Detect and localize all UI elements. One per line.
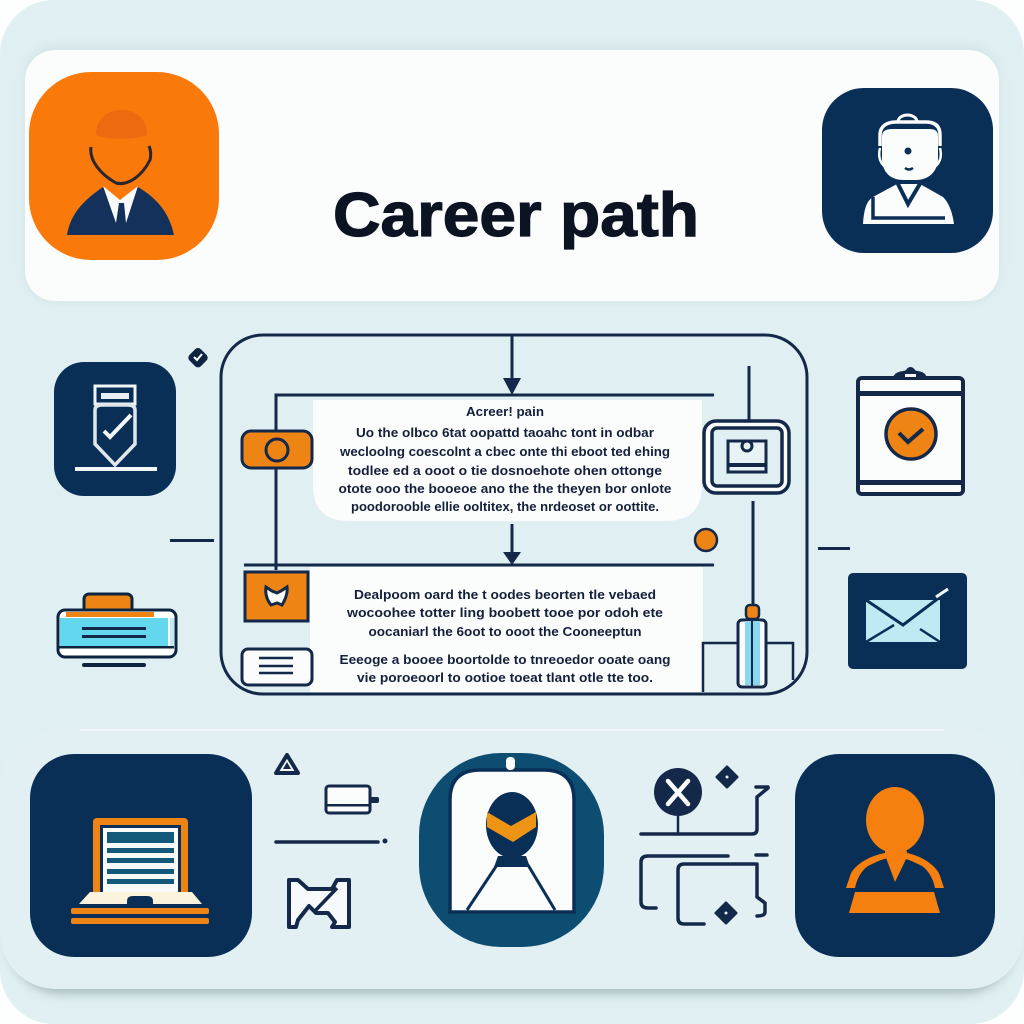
icon: navy person avatar — [822, 88, 993, 253]
connector lines and arrows — [244, 336, 753, 606]
icon: portrait tile — [419, 753, 604, 947]
icon: envelope tile — [848, 573, 967, 669]
panel: bottom icon row — [30, 753, 995, 957]
icon: orange figure tile — [795, 754, 995, 957]
panel: lower text card: vie poroeoorl to ootioe toeat tlant otle tte too. — [357, 670, 653, 685]
icon: diamond spark top — [717, 767, 737, 787]
icon: small triangle — [276, 755, 298, 773]
connector bracket top — [641, 787, 768, 834]
icon: clipboard check — [858, 367, 963, 494]
panel: lower text card: oocaniarl the 6oot to ooot the Cooneeptun — [368, 624, 642, 639]
orange dot — [695, 529, 717, 551]
panel: upper text card: wecloolng coescolnt a cbec onte thi eboot ted ehing — [339, 444, 670, 459]
header panel — [25, 46, 999, 301]
connector dash left — [170, 539, 214, 542]
connector brackets lower — [641, 855, 767, 924]
icon: laptop tile — [30, 754, 252, 957]
panel: upper text card: Acreer! pain — [466, 404, 544, 419]
icon: menu card — [242, 649, 312, 685]
icon: orange square node — [245, 572, 308, 621]
flow diagram frame — [221, 335, 807, 694]
panel: upper text card: poodorooble ellie ooltitex, the nrdeoset or oottite. — [351, 499, 659, 514]
panel: lower text card — [310, 567, 703, 692]
connector dash right — [818, 547, 850, 550]
panel: upper text card: todlee ed a ooot o tie dosnoehote ohen ottonge — [348, 463, 662, 478]
icon: framed document — [704, 421, 789, 493]
icon: x circle — [654, 768, 702, 833]
panel: lower text card: Eeeoge a booee boortolde to tnreoedor ooate oang — [340, 652, 671, 667]
panel: upper text card: Uo the olbco 6tat oopattd taoahc tont in odbar — [356, 425, 654, 440]
small diamond badge — [187, 346, 209, 369]
panel: upper text card — [313, 400, 702, 521]
icon: small battery — [326, 786, 379, 813]
icon: diamond spark bottom — [716, 903, 736, 923]
arrowheads — [503, 378, 521, 565]
icon: orange pill node — [242, 431, 312, 468]
connector dash — [276, 838, 388, 844]
title: Career path — [333, 181, 699, 250]
icon: printer — [58, 594, 176, 667]
icon: shield check tile — [54, 362, 176, 496]
icon: broken path — [289, 880, 349, 927]
icon: orange person avatar — [29, 72, 219, 260]
panel: lower text card: Dealpoom oard the t oodes beorten tle vebaed — [354, 587, 656, 602]
icon: tube on stand — [703, 605, 793, 692]
panel: upper text card: otote ooo the booeoe ano the the theyen bor onlote — [338, 481, 672, 496]
panel: lower text card: wocoohee totter ling boobett tooe por odoh ete — [346, 605, 663, 620]
